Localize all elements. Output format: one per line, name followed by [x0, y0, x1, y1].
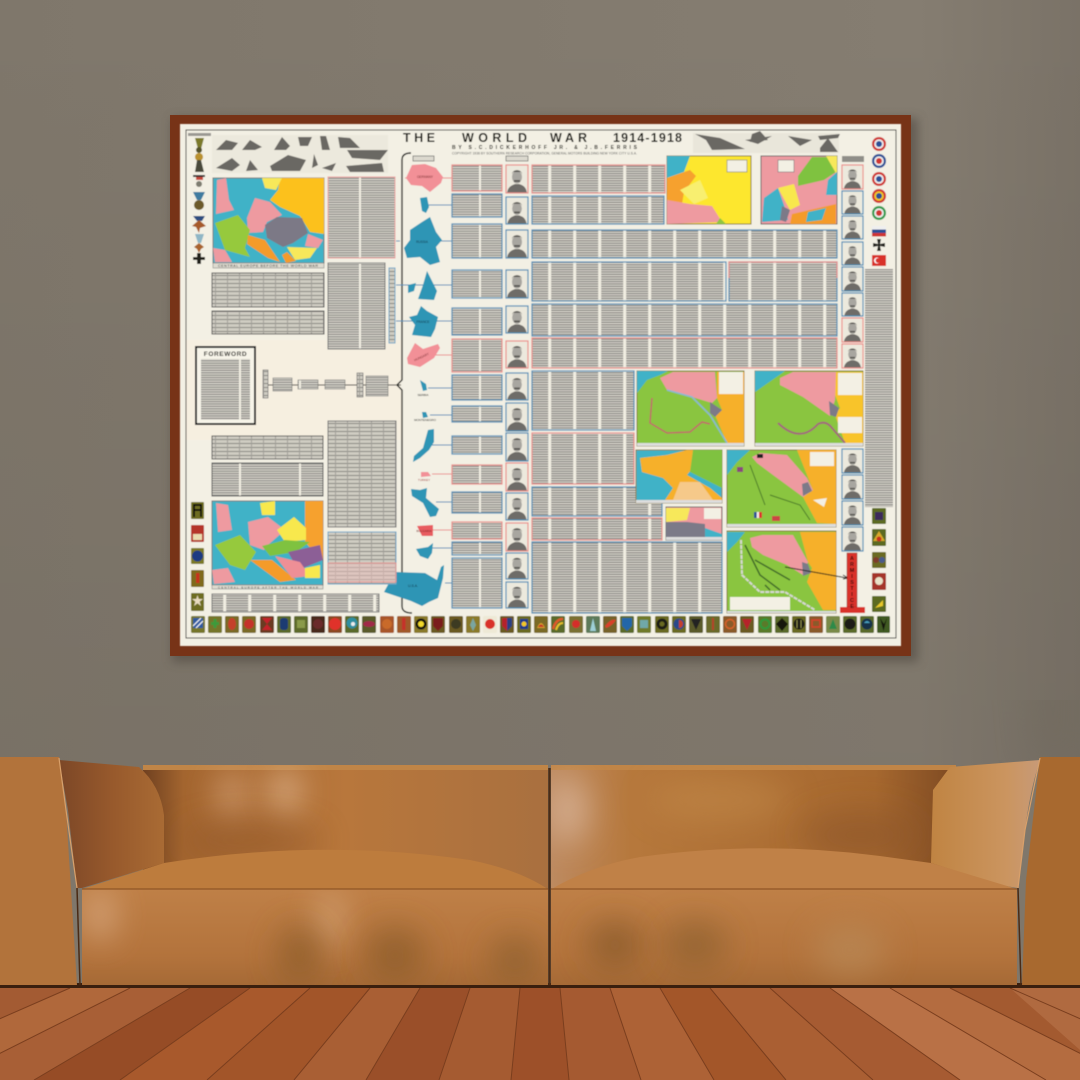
country: Germany	[406, 164, 443, 192]
floor	[0, 985, 1080, 1080]
country: Belgium	[420, 197, 429, 213]
map: western front B	[755, 371, 863, 446]
table: cost of the world war	[212, 311, 324, 334]
map: Italian front	[666, 507, 722, 540]
countries column headings	[413, 156, 864, 162]
copyright line: COPYRIGHT 1936 BY SOUTHERN RESEARCH CORPORATION, GENERAL MOTORS BUILDING NEW YORK CITY U.S.A.	[452, 152, 637, 156]
text: interesting notes box	[328, 263, 385, 349]
map: eastern front	[667, 156, 751, 224]
right inner arm	[931, 760, 1040, 888]
box: peace treaties	[212, 463, 323, 496]
division patches left	[191, 502, 204, 611]
country: United Kingdom	[408, 271, 437, 300]
shadow under sofa	[0, 983, 1080, 988]
inner border	[186, 130, 896, 638]
blue strip of allied countries	[389, 268, 395, 343]
title: 1914-1918	[613, 131, 682, 145]
poster frame	[170, 115, 911, 656]
country: Russia	[404, 217, 442, 265]
country: Turkey: TURKEY	[418, 478, 430, 482]
country: Roumania	[416, 543, 433, 559]
right seat front	[551, 889, 1017, 985]
map: central Europe before the war	[213, 178, 324, 268]
division patches bottom row	[191, 616, 890, 633]
armistice column	[840, 553, 865, 613]
text: assassination panel (red)	[328, 177, 395, 258]
country: Montenegro: MONTENEGRO	[414, 418, 437, 422]
war engravings top left	[212, 135, 388, 173]
flags and plane on map	[754, 512, 762, 518]
map caption: CENTRAL EUROPE BEFORE THE WORLD WAR	[218, 264, 318, 268]
table: casualties left	[212, 436, 323, 459]
foreword panel: FOREWORD	[204, 351, 247, 358]
country: Germany: GERMANY	[417, 175, 434, 179]
table: allied and central statistics	[328, 532, 396, 584]
table: naval tonnage	[212, 273, 324, 307]
title: THE	[403, 131, 435, 145]
country: Bulgaria: BULGARIA	[416, 529, 432, 533]
chronology bracket	[397, 153, 412, 613]
map: Gallipoli / Turkey	[636, 450, 722, 503]
foreword panel	[196, 347, 255, 424]
country: Russia: RUSSIA	[416, 240, 429, 244]
title: WAR	[550, 131, 587, 145]
country: USA: U.S.A.	[408, 584, 418, 588]
right seat top	[550, 848, 1017, 890]
connector lines red	[405, 178, 452, 530]
country: Japan	[413, 429, 434, 462]
country: Bulgaria	[416, 525, 433, 536]
map: central Europe after the war	[212, 501, 323, 589]
country: France	[409, 306, 438, 337]
frame shadow	[172, 118, 918, 662]
flow chart of alliances	[263, 370, 401, 398]
war engravings top right aircraft	[693, 131, 840, 153]
left inner arm	[59, 760, 164, 888]
country: Italy	[411, 488, 439, 517]
stat tables by nation	[452, 165, 502, 608]
wall shadow at right	[1020, 490, 1080, 760]
medals column	[188, 133, 211, 264]
right back cushion	[548, 765, 956, 890]
country: Serbia	[417, 380, 429, 397]
map: final front line	[727, 531, 836, 613]
map: western front C with flags	[727, 450, 836, 527]
country: Turkey	[418, 472, 431, 482]
country: USA	[384, 565, 444, 606]
title	[403, 131, 682, 156]
flag: Russia	[872, 226, 886, 236]
byline: BY S.C.DICKERHOFF JR. & J.B.FERRIS	[452, 145, 638, 151]
commander portraits right	[842, 165, 863, 551]
map: western front A	[637, 371, 744, 446]
country: Austria-Hungary: HUNGARY	[414, 352, 430, 362]
arrow to armistice	[785, 567, 848, 579]
portraits of national leaders	[506, 165, 528, 608]
map caption: CENTRAL EUROPE AFTER THE WORLD WAR	[218, 585, 319, 589]
division patches right	[872, 508, 886, 612]
iron cross emblem	[873, 239, 885, 251]
sofa	[0, 757, 1080, 988]
poster artwork	[180, 124, 901, 646]
country: Montenegro	[414, 412, 437, 422]
foreword text	[201, 359, 250, 420]
flag: Turkey	[872, 255, 886, 266]
table: chronology tall	[328, 421, 396, 527]
country: Serbia: SERBIA	[417, 393, 429, 397]
right outer arm	[1022, 757, 1080, 985]
map: Balkan front	[761, 156, 837, 224]
poster paper	[180, 124, 901, 646]
left seat front	[82, 889, 548, 985]
chronology text panels	[532, 165, 837, 613]
wall background	[0, 0, 1080, 770]
country: France: FRANCE	[416, 320, 430, 324]
armistice column: ARMISTICE	[849, 556, 855, 610]
text: bottom notes	[212, 594, 379, 612]
wall shading	[0, 0, 1080, 770]
air force roundels	[872, 137, 886, 220]
left seat top	[82, 850, 549, 890]
paper aged tint	[186, 340, 401, 440]
title: WORLD	[462, 131, 527, 145]
connector lines blue	[396, 205, 452, 583]
left outer arm	[0, 757, 77, 985]
iron cross medal	[193, 253, 205, 264]
country: Austria-Hungary	[407, 343, 440, 367]
left back cushion	[143, 765, 548, 890]
text: right column notes	[865, 269, 893, 507]
